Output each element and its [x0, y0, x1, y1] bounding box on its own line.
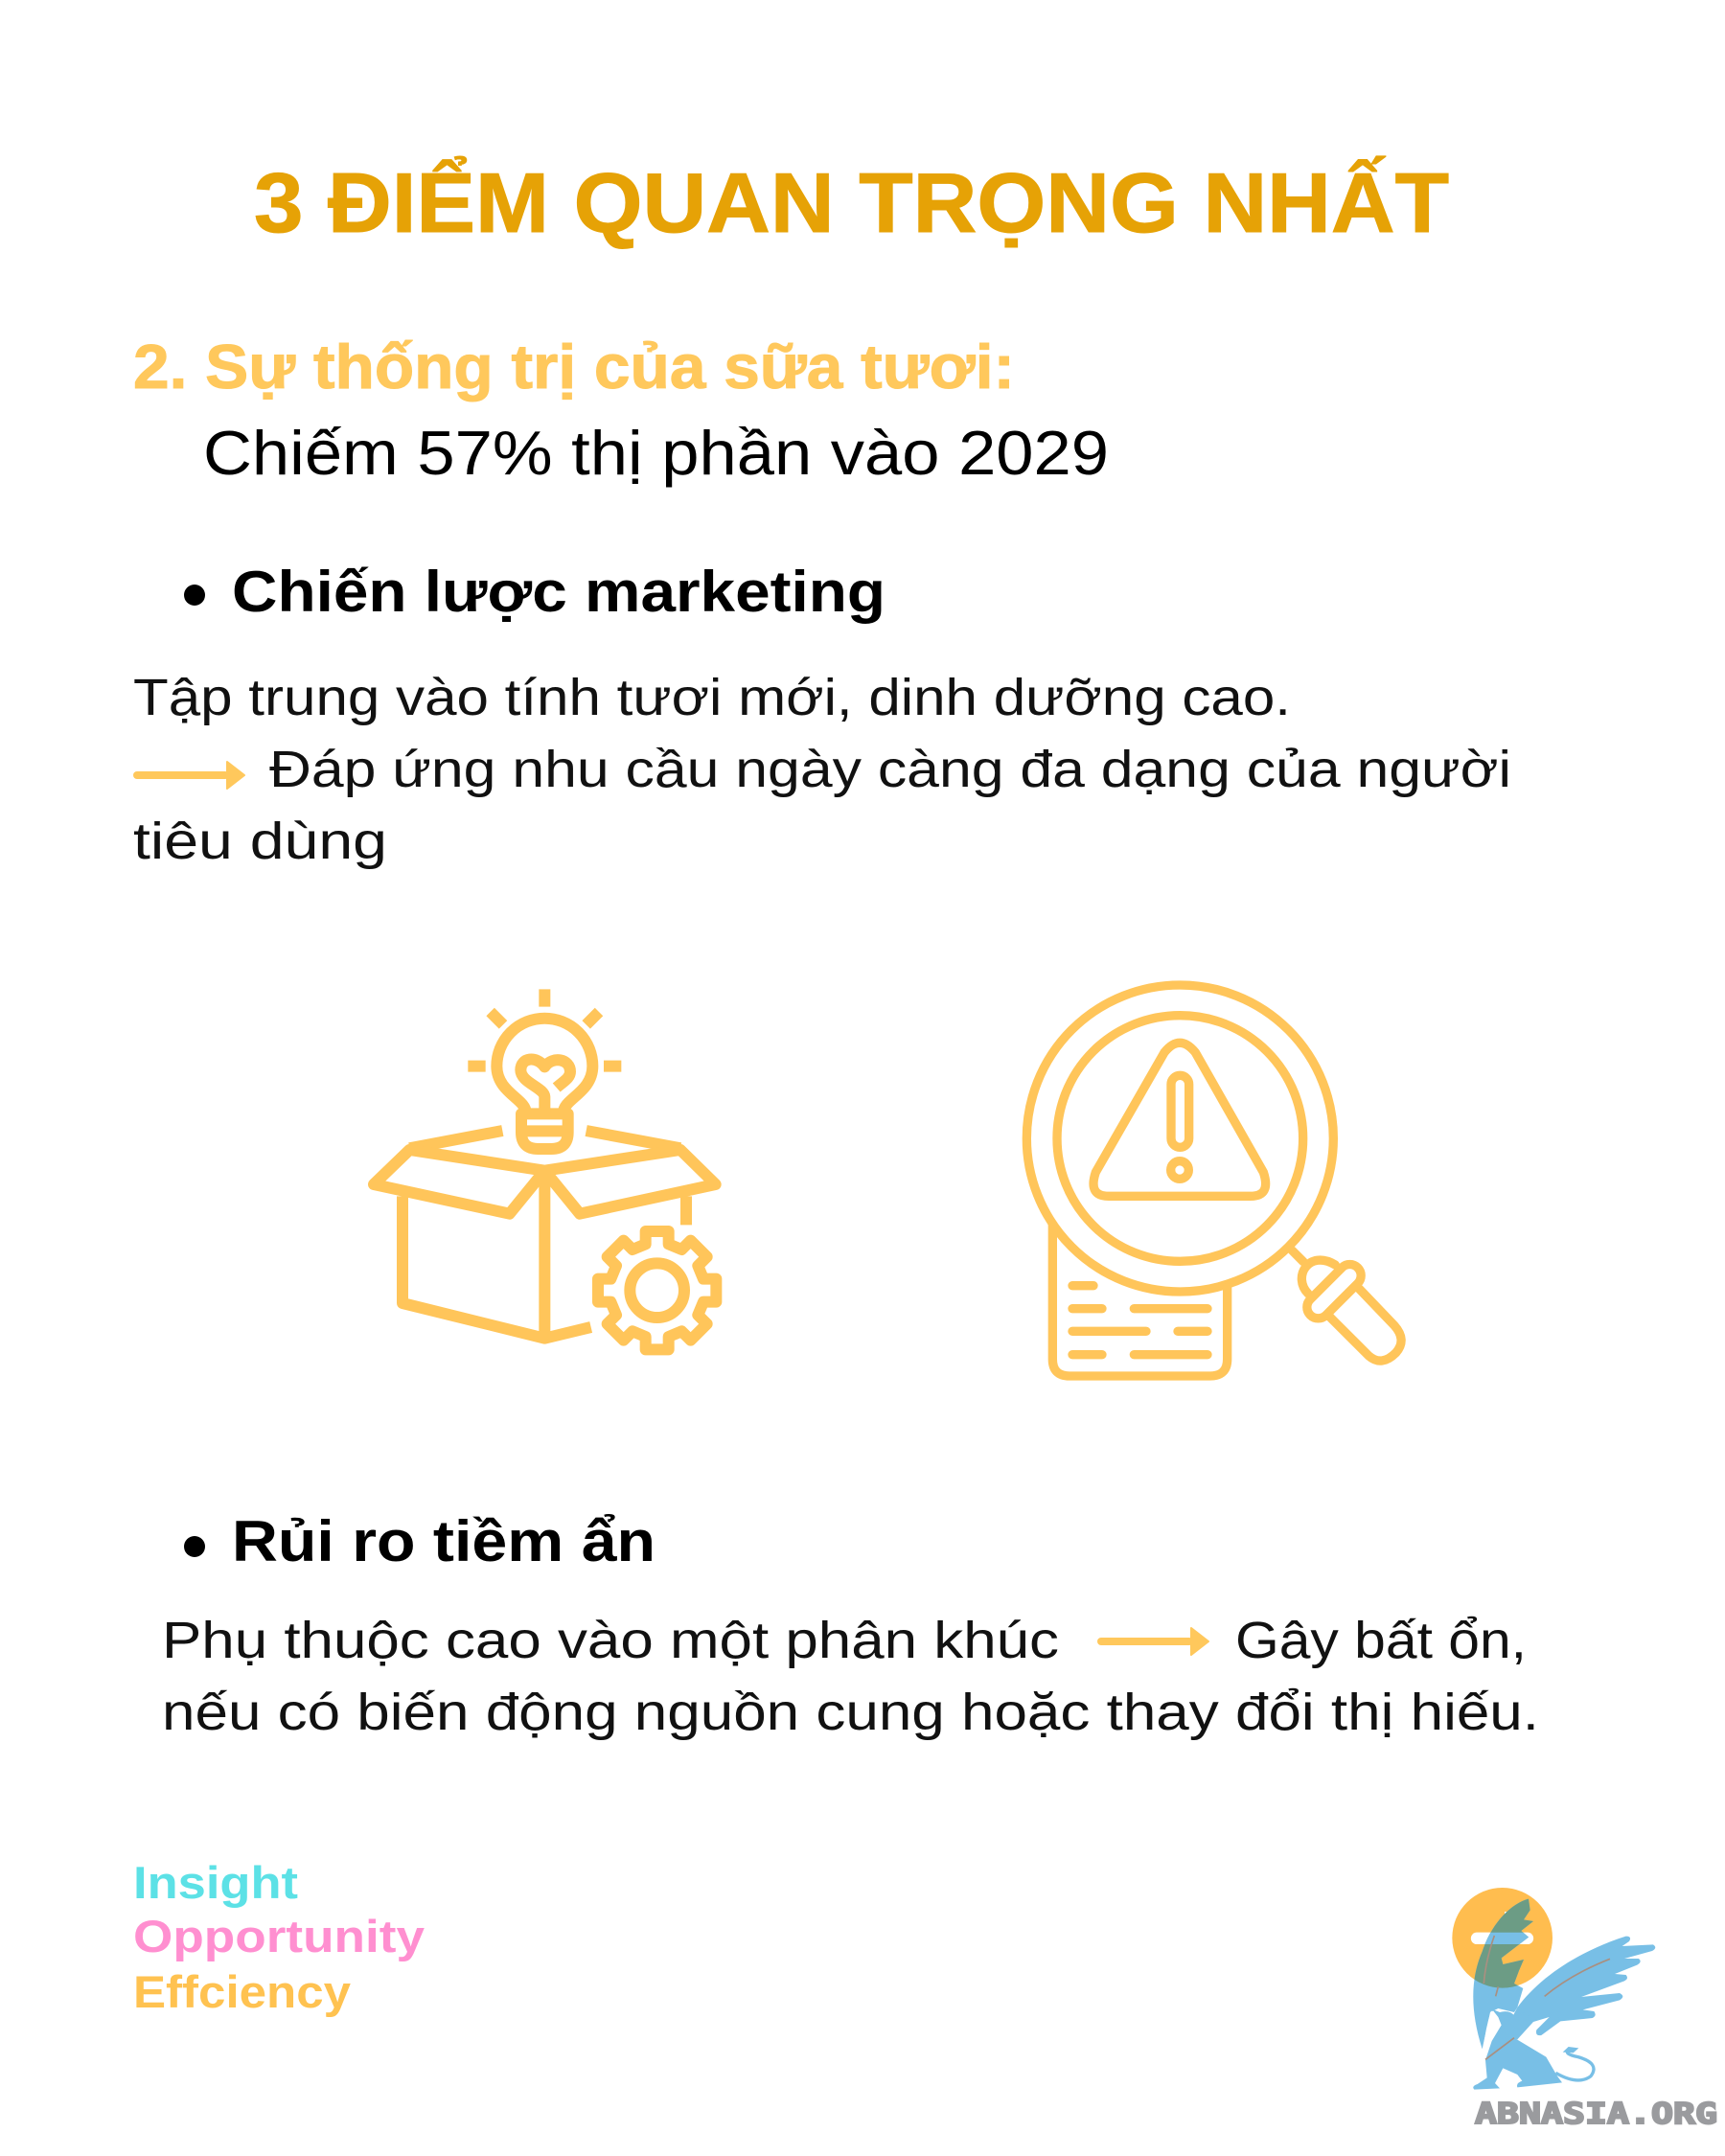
logo: griffin ABN Asia: ABNASIA.ORG: [1475, 2098, 1717, 2131]
tagline: Effciency: [133, 1966, 351, 2017]
risk text block: [162, 1612, 1539, 1741]
tagline: Insight: [133, 1857, 298, 1908]
risk text block: Phụ thuộc cao vào một phân khúc: [162, 1612, 1059, 1669]
bullet: risk heading: Rủi ro tiềm ẩn: [232, 1509, 656, 1573]
arrow: risk: [1097, 1628, 1208, 1655]
section heading: 2. Sự thống trị của sữa tươi:: [133, 332, 1015, 401]
marketing text block: Đáp ứng nhu cầu ngày càng đa dạng của người: [269, 741, 1511, 798]
bullet: marketing heading: Chiến lược marketing: [232, 560, 886, 624]
risk text block: Gây bất ổn,: [1235, 1612, 1527, 1669]
tagline: [133, 1857, 425, 2017]
marketing text block: [133, 669, 1511, 870]
icon: box with light bulb and gear: [374, 989, 716, 1349]
marketing text block: Tập trung vào tính tươi mới, dinh dưỡng cao.: [133, 669, 1291, 726]
arrow: marketing: [133, 762, 244, 789]
marketing text block: tiêu dùng: [133, 813, 387, 870]
tagline: Opportunity: [133, 1911, 425, 1961]
section subheading: Chiếm 57% thị phần vào 2029: [203, 418, 1109, 488]
logo: griffin ABN Asia: [1452, 1888, 1717, 2131]
title: 3 ĐIỂM QUAN TRỌNG NHẤT: [254, 155, 1449, 250]
risk text block: nếu có biến động nguồn cung hoặc thay đổi thị hiếu.: [162, 1684, 1539, 1741]
icon: magnifying glass with warning on document: [1026, 985, 1401, 1376]
